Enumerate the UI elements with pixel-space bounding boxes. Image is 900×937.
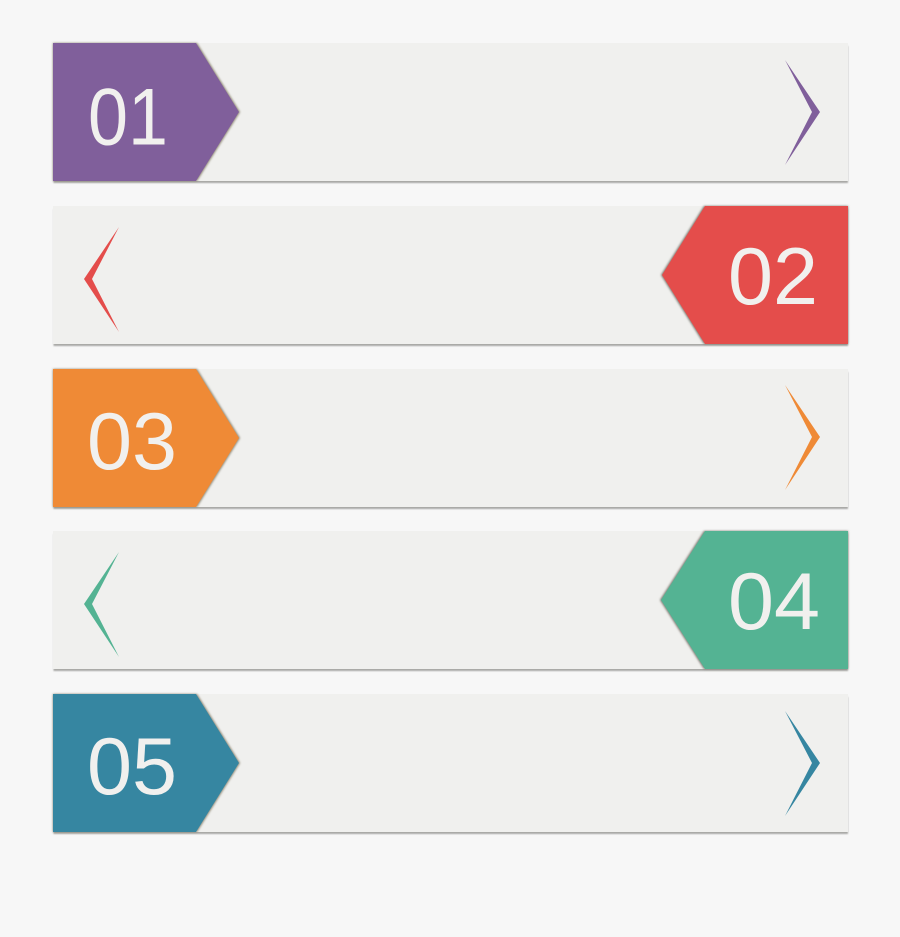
number tab 02 <box>662 206 848 344</box>
number tab 04 <box>661 531 848 669</box>
chevron icon 03 <box>785 385 820 490</box>
number 04: 04 <box>728 557 820 647</box>
banner 05 <box>53 694 848 834</box>
number tab 03 <box>53 369 239 507</box>
number 01: 01 <box>88 72 168 162</box>
number tab 01 <box>53 43 239 181</box>
number 02: 02 <box>728 232 818 322</box>
number 03: 03 <box>87 397 177 487</box>
number 05: 05 <box>87 722 177 812</box>
chevron icon 02 <box>84 227 119 332</box>
chevron icon 01 <box>785 60 820 165</box>
chevron icon 05 <box>785 711 820 816</box>
chevron icon 04 <box>84 552 119 657</box>
number tab 05 <box>53 694 239 832</box>
banner 01 <box>53 43 848 183</box>
banner 03 <box>53 369 848 509</box>
banner 04 <box>53 531 848 671</box>
banner 02 <box>53 206 848 346</box>
